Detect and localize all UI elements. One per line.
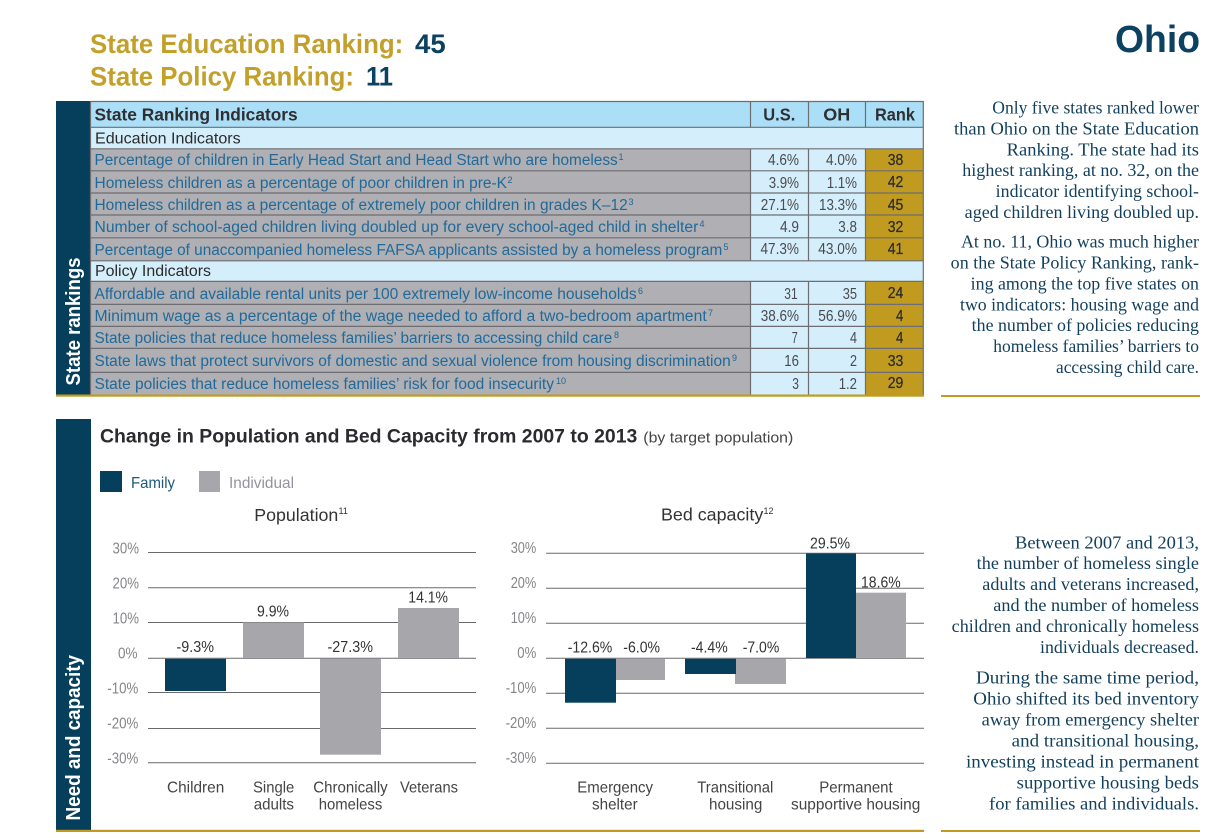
chart: population: 11: [338, 506, 348, 516]
text block: need and capacity summary: children and chronically homeless: [952, 616, 1199, 636]
chart: bed capacity: Bed capacity: [661, 505, 764, 525]
chart: population: -9.3%: [176, 639, 214, 656]
text block: need and capacity summary: and transitional housing,: [1012, 730, 1199, 750]
row: grades K-12: 3: [628, 197, 634, 207]
panel: need and capacity sidebar: [56, 419, 91, 830]
chart: bed capacity: shelter: [592, 796, 638, 813]
chart: bed capacity: Emergency: [577, 779, 653, 796]
row: doubled up: [90, 215, 924, 238]
row: grades K-12: 13.3%: [819, 197, 857, 214]
row: food insecurity: 29: [888, 375, 903, 392]
row: pre-K: 1.1%: [827, 175, 857, 192]
row: food insecurity: 3: [792, 376, 799, 393]
row: food insecurity: 1.2: [839, 376, 857, 393]
row: housing discrimination: State laws that protect survivors of domestic and sexual violence from housing discrimination: [94, 353, 731, 370]
text block: education and policy summary: highest ranking, at no. 32, on the: [962, 160, 1199, 180]
text block: need and capacity summary: During the same time period,: [976, 667, 1199, 687]
chart: bed capacity: 0%: [517, 645, 536, 662]
chart: bed capacity: housing: [709, 796, 762, 813]
row: head start: Percentage of children in Early Head Start and Head Start who are homeless: [94, 152, 618, 169]
chart: bed capacity: -10%: [506, 680, 536, 697]
text block: need and capacity summary: Between 2007 and 2013,: [1015, 532, 1199, 552]
chart: population: -20%: [107, 715, 138, 732]
panel: state ranking indicators table: [56, 101, 924, 397]
heading: state rankings: State Policy Ranking:: [90, 62, 354, 92]
row: rental units: [90, 282, 924, 304]
row: food insecurity: State policies that reduce homeless families’ risk for food insecurity: [94, 376, 554, 393]
row: grades K-12: 27.1%: [761, 197, 799, 214]
subheading: policy indicators: Policy Indicators: [95, 263, 211, 280]
chart: bed capacity: [506, 505, 924, 813]
row: food insecurity: 10: [556, 376, 566, 386]
panel: need and capacity sidebar: Need and capacity: [62, 654, 85, 820]
text block: need and capacity summary: the number of homeless single: [977, 553, 1199, 573]
text block: education and policy summary: two indicators: housing wage and: [960, 294, 1199, 314]
chart: population: adults: [254, 796, 294, 813]
row: minimum wage: 56.9%: [818, 308, 857, 325]
title: Ohio: Ohio: [1115, 19, 1200, 61]
row: rental units: 24: [888, 285, 903, 302]
row: child care: 7: [792, 330, 798, 347]
row: pre-K: 3.9%: [769, 175, 799, 192]
heading: state rankings: [90, 29, 446, 92]
row: pre-K: Homeless children as a percentage of poor children in pre-K: [94, 175, 508, 192]
chart: bed capacity: 29.5%: [810, 535, 850, 552]
row: FAFSA: 5: [724, 242, 729, 252]
chart: bed capacity: -6.0%: [623, 639, 660, 656]
text block: education and policy summary: on the State Policy Ranking, rank-: [951, 252, 1199, 272]
row: doubled up: 32: [888, 219, 903, 236]
row: minimum wage: 4: [896, 308, 903, 325]
text block: education and policy summary: than Ohio on the State Education: [954, 118, 1199, 138]
chart: bed capacity: 20%: [511, 575, 536, 592]
chart: bed capacity: -7.0%: [743, 639, 779, 656]
text block: education and policy summary: At no. 11, Ohio was much higher: [961, 232, 1199, 252]
chart heading: Change in Population and Bed Capacity from 2007 to 2013: [100, 427, 637, 448]
row: child care: 4: [850, 330, 857, 347]
row: rental units: Affordable and available rental units per 100 extremely low-income households: [94, 286, 637, 303]
row: head start: 38: [888, 152, 903, 169]
row: child care: [90, 326, 924, 348]
row: FAFSA: [90, 238, 924, 261]
row: doubled up: 4: [700, 219, 705, 229]
row: housing discrimination: [90, 348, 924, 372]
panel: state rankings sidebar: [56, 101, 90, 396]
row: housing discrimination: 9: [732, 353, 737, 363]
text block: education and policy summary: ing among the top five states on: [971, 274, 1199, 294]
chart: population: -10%: [107, 680, 138, 697]
row: rental units: 6: [638, 286, 643, 296]
chart: population: [107, 505, 476, 813]
chart: bed capacity: Permanent: [819, 779, 893, 796]
row: minimum wage: Minimum wage as a percentage of the wage needed to afford a two-bedroom apartment: [94, 308, 707, 325]
row: doubled up: 3.8: [838, 219, 857, 236]
row: FAFSA: 47.3%: [760, 241, 799, 258]
row: minimum wage: [90, 304, 924, 326]
row: FAFSA: 41: [888, 241, 903, 258]
text block: education and policy summary: aged children living doubled up.: [965, 202, 1199, 222]
text block: need and capacity summary: investing instead in permanent: [966, 751, 1199, 771]
table header row: [90, 101, 924, 127]
row: minimum wage: 38.6%: [761, 308, 799, 325]
row: minimum wage: 7: [708, 308, 713, 318]
chart: population: Population: [254, 505, 338, 525]
chart: population: 14.1%: [408, 590, 448, 607]
chart: population: -30%: [107, 750, 138, 767]
text block: education and policy summary: [951, 98, 1199, 377]
text block: need and capacity summary: for families and individuals.: [989, 793, 1199, 813]
row: doubled up: Number of school-aged children living doubled up for every school-aged child in shelter: [94, 219, 698, 236]
panel: state rankings sidebar: State rankings: [62, 258, 85, 386]
table header row: State Ranking Indicators: [94, 105, 298, 125]
heading: state rankings: State Education Ranking:: [90, 29, 403, 59]
row: head start: 1: [618, 152, 624, 162]
chart: population: 0%: [118, 645, 138, 662]
text block: need and capacity summary: Ohio shifted its bed inventory: [973, 688, 1199, 708]
row: pre-K: 2: [508, 175, 513, 185]
chart: bed capacity: -12.6%: [568, 639, 612, 656]
row: child care: State policies that reduce homeless families’ barriers to accessing child care: [94, 330, 612, 347]
chart: bed capacity: 18.6%: [861, 574, 901, 591]
table header row: U.S.: [763, 105, 795, 125]
chart: bed capacity: -30%: [506, 750, 536, 767]
text block: education and policy summary: accessing child care.: [1056, 357, 1199, 377]
chart: bed capacity: 12: [764, 506, 774, 516]
text block: need and capacity summary: away from emergency shelter: [982, 709, 1199, 729]
chart: bed capacity: -4.4%: [691, 639, 728, 656]
row: grades K-12: [90, 193, 924, 215]
row: head start: 4.6%: [768, 152, 799, 169]
row: housing discrimination: 2: [850, 353, 857, 370]
heading: state rankings: 11: [366, 62, 393, 92]
row: rental units: 31: [784, 286, 798, 303]
text block: education and policy summary: Only five states ranked lower: [992, 98, 1199, 118]
chart heading: (by target population): [643, 430, 793, 447]
text block: need and capacity summary: adults and veterans increased,: [982, 574, 1199, 594]
chart: population: homeless: [319, 796, 382, 813]
chart: population: 30%: [112, 540, 139, 557]
heading: state rankings: 45: [415, 29, 446, 59]
subheading: education indicators: Education Indicators: [95, 130, 241, 147]
chart: bed capacity: -20%: [506, 715, 536, 732]
legend: Family: [131, 475, 175, 492]
subheading: education indicators: [90, 127, 924, 149]
text block: education and policy summary: Ranking. The state had its: [1007, 140, 1199, 160]
row: pre-K: 42: [888, 174, 903, 191]
chart: population: -27.3%: [328, 639, 373, 656]
text block: need and capacity summary: supportive housing beds: [1017, 772, 1199, 792]
row: housing discrimination: 16: [784, 353, 799, 370]
chart: population: 10%: [112, 610, 139, 627]
text block: education and policy summary: homeless families’ barriers to: [993, 336, 1199, 356]
chart: population: Chronically: [313, 779, 388, 796]
text block: education and policy summary: indicator identifying school-: [996, 181, 1199, 201]
chart: population: 9.9%: [257, 604, 289, 621]
chart: bed capacity: supportive housing: [791, 796, 920, 813]
chart: population: Veterans: [400, 779, 458, 796]
row: head start: 4.0%: [826, 152, 857, 169]
text block: need and capacity summary: individuals decreased.: [1040, 637, 1199, 657]
table header row: OH: [823, 105, 850, 125]
row: grades K-12: Homeless children as a percentage of extremely poor children in grades K–12: [94, 197, 628, 214]
table header row: Rank: [875, 105, 915, 125]
text block: need and capacity summary: [952, 532, 1199, 813]
row: FAFSA: 43.0%: [818, 241, 857, 258]
chart: bed capacity: Transitional: [697, 779, 773, 796]
legend: Individual: [229, 475, 294, 492]
row: child care: 4: [896, 330, 903, 347]
subheading: policy indicators: [90, 261, 924, 282]
row: head start: [90, 149, 924, 171]
row: grades K-12: 45: [888, 197, 903, 214]
row: FAFSA: Percentage of unaccompanied homeless FAFSA applicants assisted by a homeless program: [94, 242, 722, 259]
legend: [100, 471, 294, 492]
text block: need and capacity summary: and the number of homeless: [993, 595, 1199, 615]
chart: population: Children: [167, 779, 224, 796]
chart: bed capacity: 30%: [511, 540, 536, 557]
row: child care: 8: [614, 330, 619, 340]
text block: education and policy summary: the number of policies reducing: [972, 315, 1199, 335]
row: pre-K: [90, 171, 924, 193]
chart: bed capacity: 10%: [511, 610, 536, 627]
row: food insecurity: [90, 372, 924, 394]
row: housing discrimination: 33: [888, 353, 903, 370]
row: doubled up: 4.9: [780, 219, 799, 236]
chart: population: 20%: [112, 575, 139, 592]
chart: population: Single: [253, 779, 294, 796]
row: rental units: 35: [843, 286, 857, 303]
